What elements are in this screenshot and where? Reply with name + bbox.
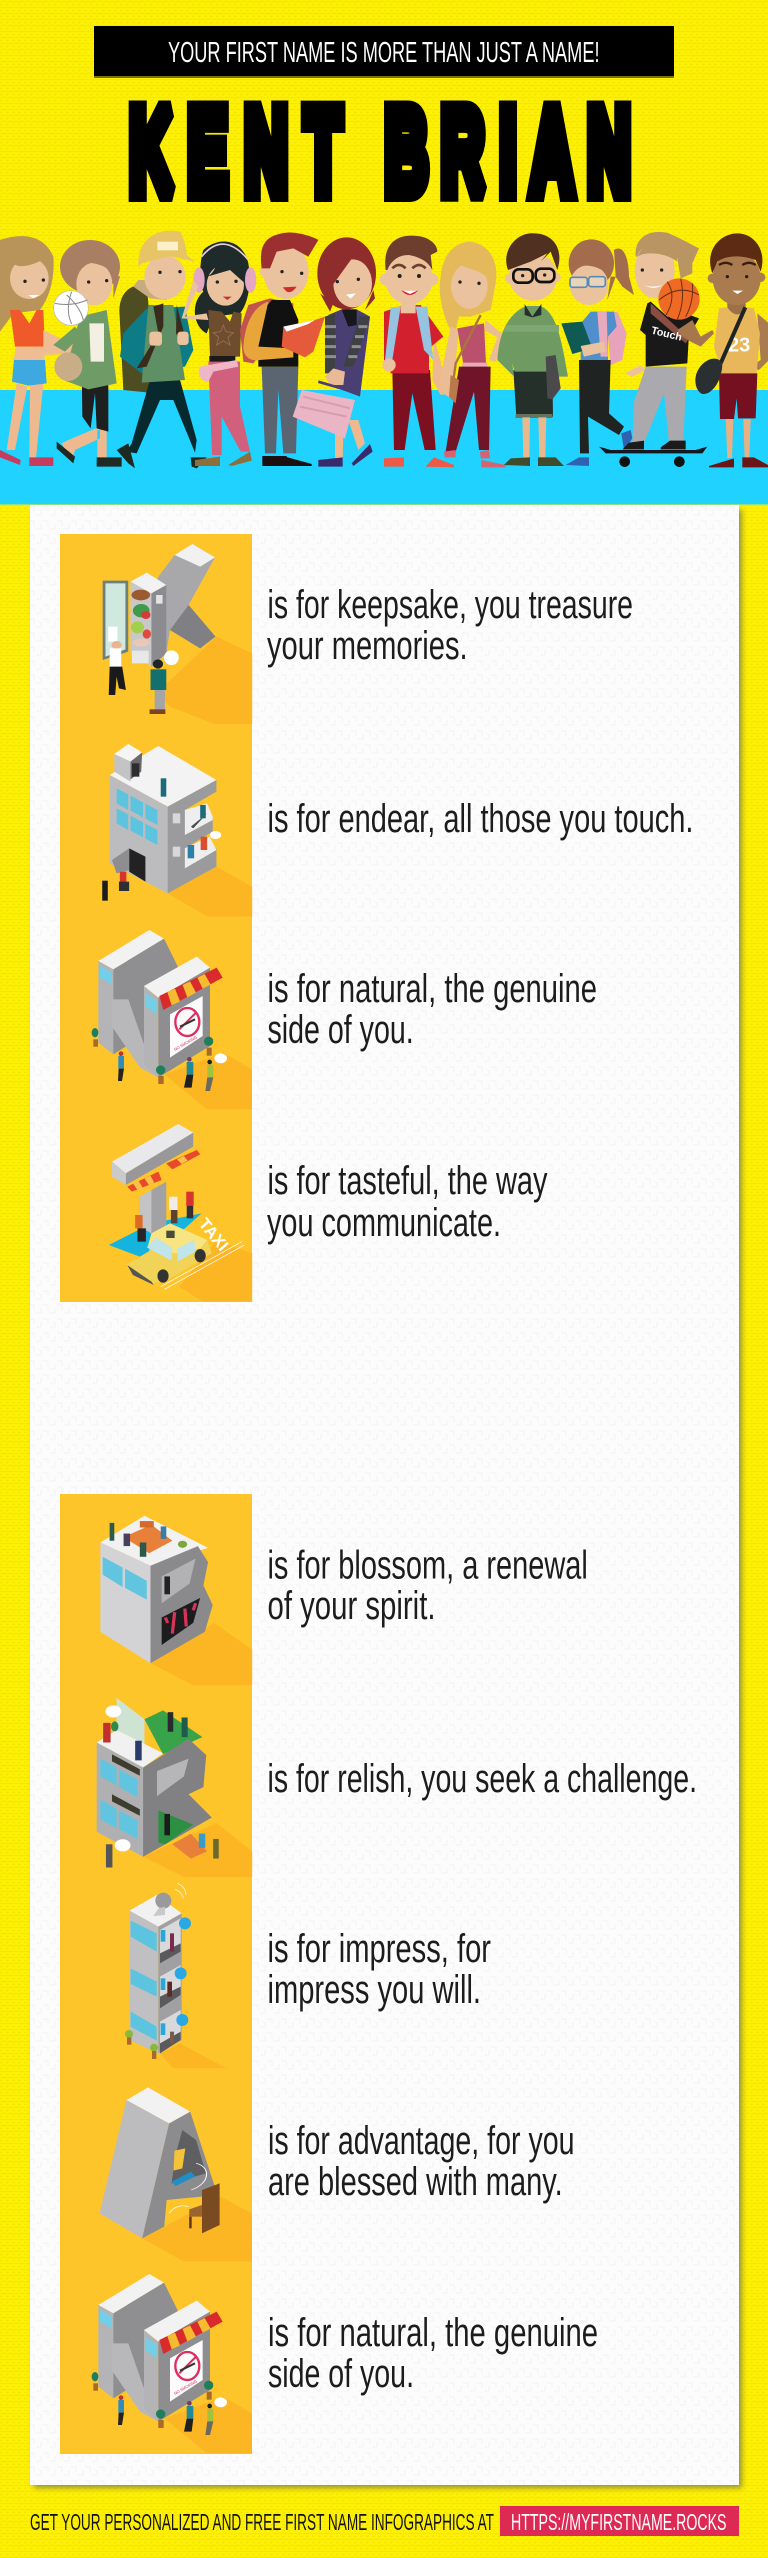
text: I line <box>268 1927 491 2012</box>
text: T line <box>267 1159 548 1245</box>
person 2: girl with volleyball <box>53 240 122 467</box>
icon: isometric letter T with taxi <box>109 1124 252 1302</box>
person 11: skater holding a basketball <box>599 232 714 467</box>
person 4: girl with pink headphones <box>182 241 256 466</box>
illustration: group of twelve young people, right half <box>380 232 768 467</box>
person 6: girl with pink bag <box>293 237 376 467</box>
people and icons <box>125 1917 191 2059</box>
speech bubble <box>164 650 179 665</box>
roof dish <box>153 1883 186 1916</box>
text: N line, last name: side of you. <box>268 2352 414 2396</box>
text: I line: impress you will. <box>268 1968 481 2012</box>
text: I line: is for impress, for <box>268 1927 491 1971</box>
illustration: group of twelve young people, left half <box>0 231 376 468</box>
person 12: curly haired boy in jersey with shoulder bag: 23 <box>728 335 750 357</box>
text: A line: are blessed with many. <box>268 2160 563 2204</box>
text: T line: is for tasteful, the way <box>268 1159 548 1203</box>
name title: KENT BRIAN <box>129 85 631 219</box>
icon: isometric letter N with awning, last name <box>92 2274 252 2453</box>
top banner <box>94 26 674 78</box>
awning <box>159 2312 223 2354</box>
panel: orange tile for last name letters <box>60 1494 252 2454</box>
no smoking sign: NO SMOKING <box>173 1035 198 1052</box>
person 12: curly haired boy in jersey with shoulder bag <box>695 233 768 467</box>
chair <box>189 2183 220 2233</box>
figures <box>135 1192 194 1242</box>
person 11: skater holding a basketball: Touch <box>650 325 683 344</box>
icon: isometric letter R building <box>97 1698 252 1877</box>
text: N line: is for natural, the genuine <box>268 967 597 1011</box>
icon: isometric letter I tower <box>125 1883 227 2068</box>
icon: isometric letter T with taxi: TAXI <box>195 1215 231 1255</box>
text: K line <box>267 583 633 668</box>
text: K line: your memories. <box>267 624 468 668</box>
no smoking sign <box>170 996 203 1058</box>
plants and figures <box>92 1028 227 1091</box>
no smoking sign <box>170 2340 203 2402</box>
person 10: girl with ponytail, tablet and pink backpack <box>561 239 634 466</box>
text: N line: side of you. <box>268 1008 414 1052</box>
text: B line: of your spirit. <box>268 1584 436 1628</box>
text: A line: is for advantage, for you <box>268 2119 574 2163</box>
figure: customer <box>150 659 166 714</box>
awnings <box>127 1150 200 1192</box>
road marking <box>161 1242 244 1289</box>
icon: isometric letter A with chair <box>100 2087 252 2262</box>
text: K line: is for keepsake, you treasure <box>268 583 633 627</box>
panel: orange tile for first name letters <box>60 534 252 1302</box>
text: T line: you communicate. <box>267 1201 501 1245</box>
text: N line, last name: is for natural, the genuine <box>268 2311 598 2355</box>
icon: isometric letter N with awning <box>92 930 252 1109</box>
figure: chef <box>108 627 126 695</box>
person 8: blond girl in rose top <box>439 242 506 467</box>
plants and figures <box>92 2372 227 2435</box>
figures and speech bubbles <box>103 1705 219 1867</box>
text: N line <box>268 967 597 1052</box>
person 9: boy with glasses and green sweater <box>497 233 568 466</box>
text: N line, last name <box>268 2311 598 2396</box>
person 1: girl in orange top <box>0 236 80 466</box>
person 3: hiker with backpack and cap <box>117 231 207 468</box>
person 5: boy with red backpack and open book <box>240 233 325 466</box>
text: B line: is for blossom, a renewal <box>268 1544 588 1588</box>
awning <box>159 968 223 1010</box>
icon: isometric letter E building <box>102 744 252 917</box>
figures on building <box>102 778 221 901</box>
figures <box>110 1521 196 1634</box>
text: A line <box>268 2119 574 2204</box>
icon: isometric letter B building <box>100 1516 252 1685</box>
panel: white card <box>30 505 742 2488</box>
text: B line <box>268 1544 588 1628</box>
icon: isometric letter K with fridge <box>103 544 252 724</box>
no smoking sign: NO SMOKING <box>173 2379 198 2396</box>
person 7: boy in red shirt with blue straps <box>380 236 454 467</box>
taxi car <box>126 1223 212 1285</box>
floor band <box>0 390 768 504</box>
